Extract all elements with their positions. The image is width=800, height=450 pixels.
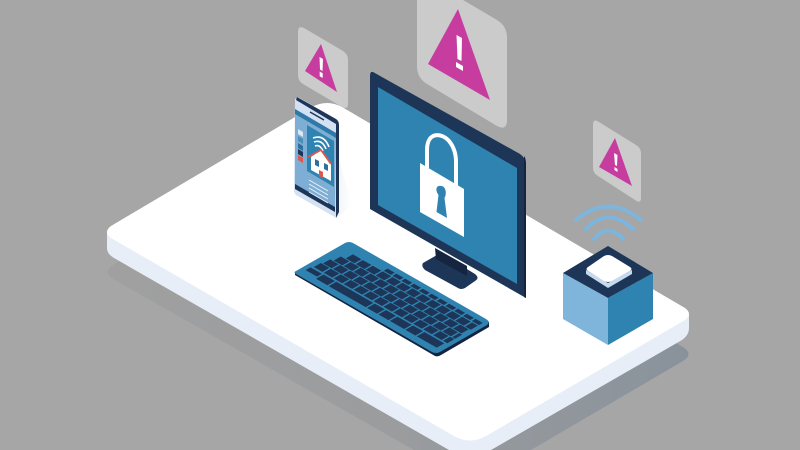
- desk shadow: [108, 143, 688, 450]
- phone screen: [295, 109, 336, 211]
- hub top: [563, 246, 653, 298]
- phone text lines: [309, 180, 328, 203]
- phone app tile: [307, 125, 334, 187]
- hub device: [563, 246, 653, 345]
- padlock shackle: [427, 135, 456, 186]
- desk edge: [107, 232, 689, 450]
- monitor: [370, 72, 526, 298]
- keyboard: [294, 242, 489, 356]
- keyboard base: [295, 273, 489, 356]
- phone wifi: [313, 137, 329, 151]
- phone: [294, 97, 352, 218]
- keyboard deck: [294, 242, 489, 353]
- alert panel: left: [298, 27, 348, 108]
- phone house: [308, 150, 331, 181]
- monitor screen: [378, 87, 517, 284]
- hub left face: [563, 273, 608, 345]
- monitor stand: [422, 248, 478, 289]
- phone menu icons: [298, 129, 303, 163]
- phone cast shadow: [320, 150, 352, 218]
- hub button: [586, 270, 632, 288]
- hub right face: [608, 273, 653, 345]
- alert panel: right: [593, 121, 641, 202]
- wifi signal: [576, 206, 641, 239]
- alert panel: large top: [417, 0, 507, 128]
- phone body: [294, 97, 339, 218]
- padlock keyhole: [436, 186, 447, 218]
- monitor frame: [370, 72, 526, 298]
- desk: [107, 103, 689, 450]
- padlock: [420, 135, 464, 237]
- padlock body: [420, 163, 464, 237]
- keyboard keys: [307, 247, 481, 346]
- phone speaker: [310, 112, 324, 120]
- monitor side edge: [524, 156, 526, 298]
- desk top: [107, 103, 689, 440]
